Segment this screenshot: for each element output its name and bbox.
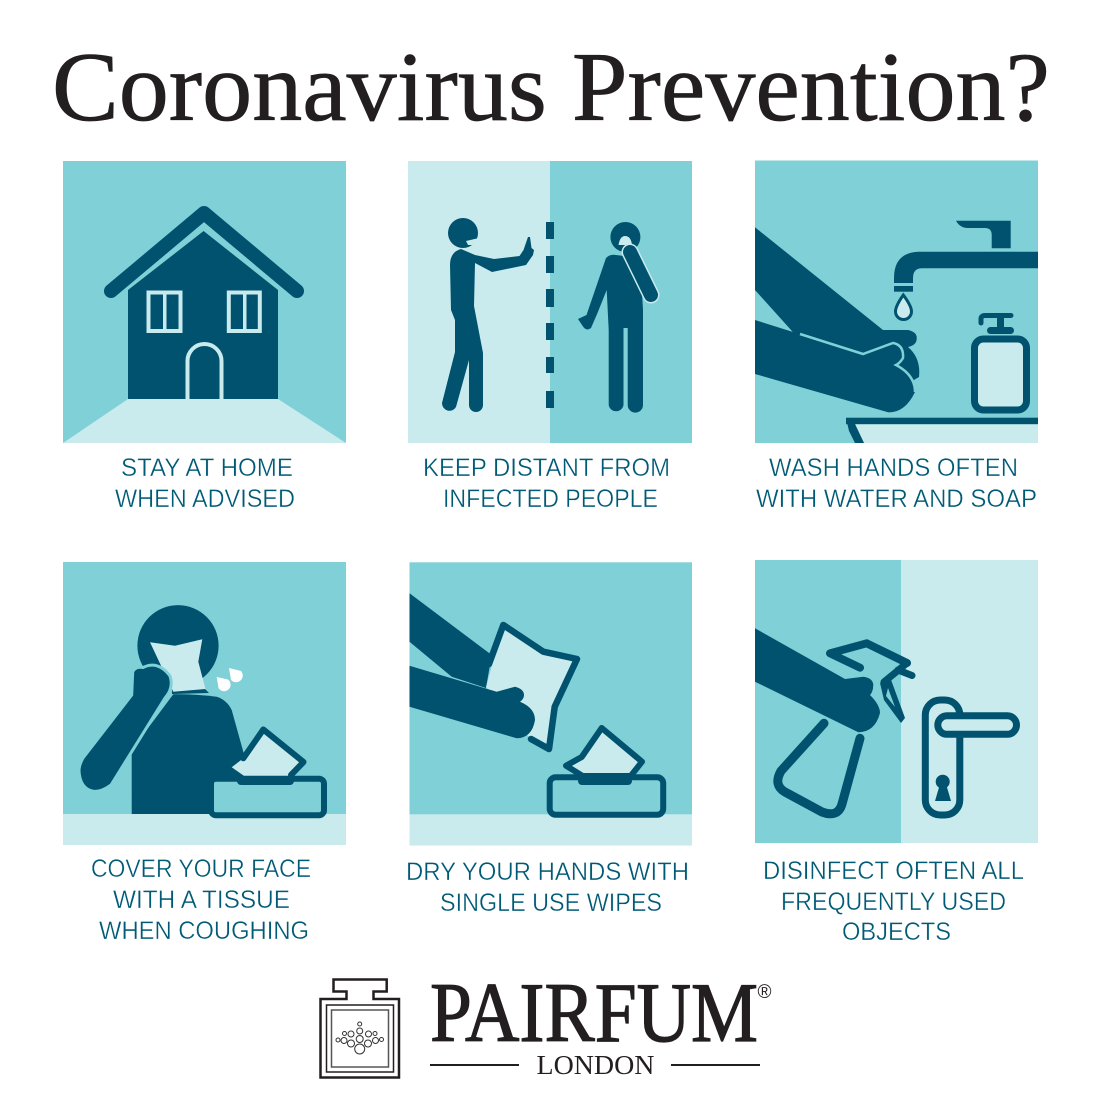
panel: stay at home bbox=[63, 161, 346, 443]
caption: disinfect bbox=[763, 857, 1024, 946]
logo: perfume bottle bbox=[320, 980, 399, 1078]
icon: washing hands bbox=[755, 227, 919, 412]
logo: wordmark: PAIRFUM bbox=[430, 966, 758, 1060]
caption: wash hands: WITH WATER AND SOAP bbox=[756, 485, 1037, 513]
panel: disinfect bbox=[755, 560, 1038, 843]
icon: spray bottle bbox=[755, 628, 912, 814]
caption: stay at home bbox=[115, 454, 295, 513]
caption: cover your face: WITH A TISSUE bbox=[113, 886, 290, 914]
caption: wash hands: WASH HANDS OFTEN bbox=[769, 454, 1018, 482]
logo: wordmark: ® bbox=[758, 982, 772, 1003]
icon: dashed barrier bbox=[546, 222, 554, 408]
caption: cover your face: WHEN COUGHING bbox=[99, 917, 309, 945]
caption: disinfect: OBJECTS bbox=[842, 918, 951, 946]
caption: disinfect: DISINFECT OFTEN ALL bbox=[763, 857, 1024, 885]
icon: house bbox=[111, 213, 297, 399]
icon: water drop bbox=[896, 295, 912, 320]
caption: stay at home: WHEN ADVISED bbox=[115, 485, 295, 513]
title: Coronavirus Prevention? bbox=[52, 33, 1050, 142]
caption: dry your hands: SINGLE USE WIPES bbox=[440, 889, 662, 917]
icon: person coughing bbox=[578, 222, 651, 413]
panel: cover your face bbox=[63, 562, 346, 845]
icon: tissue box bbox=[550, 726, 663, 815]
icon: cough droplets bbox=[217, 668, 243, 691]
caption: cover your face bbox=[91, 855, 311, 945]
logo: wordmark: LONDON bbox=[536, 1050, 654, 1080]
caption: wash hands bbox=[756, 454, 1037, 513]
caption: cover your face: COVER YOUR FACE bbox=[91, 855, 311, 883]
icon: person raising hand bbox=[442, 218, 534, 412]
caption: stay at home: STAY AT HOME bbox=[121, 454, 293, 482]
caption: keep distant bbox=[423, 454, 670, 513]
panel: wash hands bbox=[755, 160, 1038, 443]
caption: keep distant: INFECTED PEOPLE bbox=[443, 485, 658, 513]
icon: hand with wipe bbox=[410, 593, 577, 749]
caption: keep distant: KEEP DISTANT FROM bbox=[423, 454, 670, 482]
caption: disinfect: FREQUENTLY USED bbox=[781, 888, 1006, 916]
icon: tap bbox=[894, 221, 1038, 292]
icon: soap dispenser bbox=[974, 315, 1026, 410]
icon: sink bbox=[846, 418, 1038, 443]
panel: dry your hands bbox=[410, 562, 692, 845]
icon: person with tissue bbox=[79, 605, 260, 814]
panel: keep distant bbox=[408, 161, 692, 443]
icon: door handle bbox=[925, 700, 1016, 815]
icon: tissue box bbox=[211, 727, 324, 815]
caption: dry your hands: DRY YOUR HANDS WITH bbox=[406, 858, 689, 886]
caption: dry your hands bbox=[406, 858, 689, 917]
